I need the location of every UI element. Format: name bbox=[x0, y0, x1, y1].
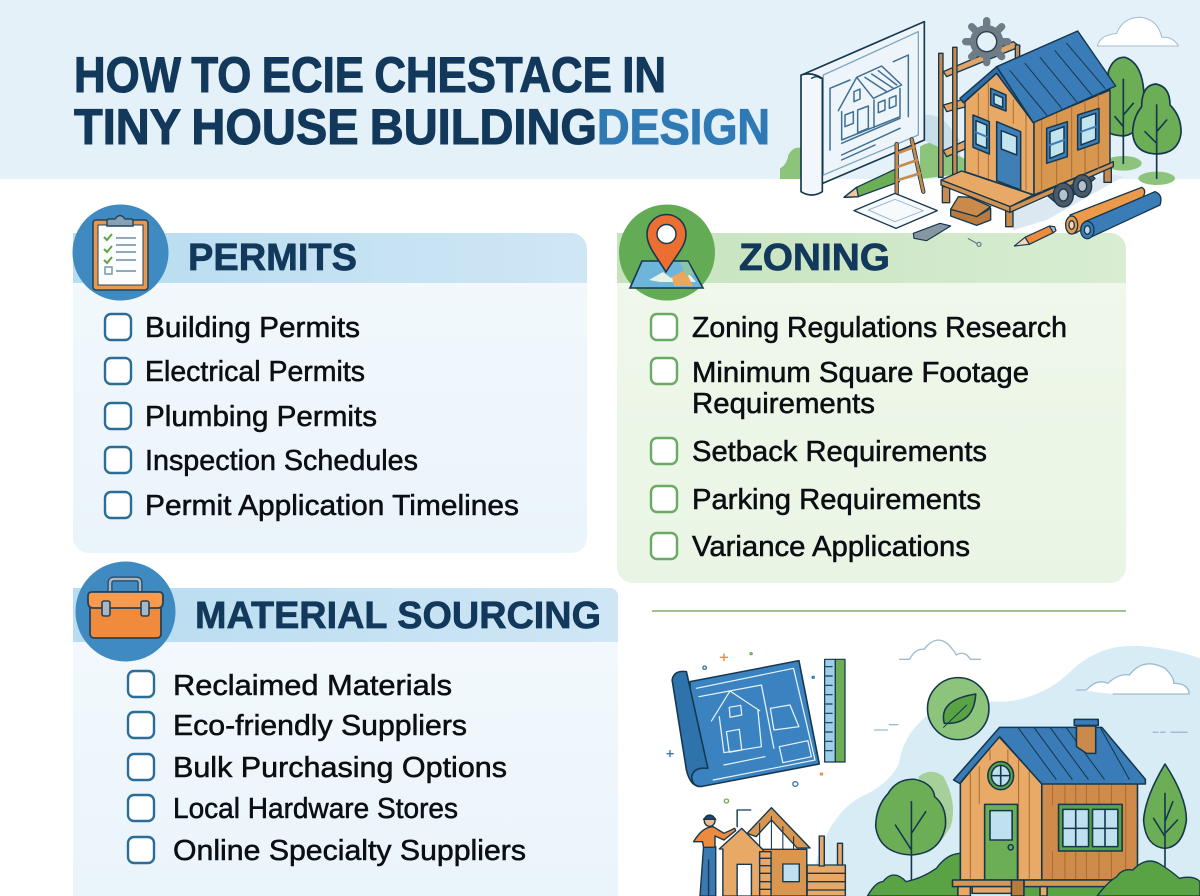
title: HOW TO ECIE CHESTACE IN bbox=[74, 47, 666, 103]
permits checklist: Plumbing Permits bbox=[145, 401, 377, 433]
ruler bbox=[825, 659, 845, 762]
deck bbox=[941, 162, 1113, 227]
title: TINY HOUSE BUILDING bbox=[74, 99, 597, 155]
sparkles bbox=[667, 653, 822, 803]
trailer bbox=[1047, 169, 1095, 203]
illustration: finished tiny house and plans bbox=[667, 640, 1200, 896]
permits checklist bbox=[105, 312, 519, 522]
heading: zoning: ZONING bbox=[739, 237, 890, 279]
zoning checklist bbox=[651, 312, 1067, 563]
trees bbox=[1105, 57, 1181, 185]
material sourcing checklist: Eco-friendly Suppliers bbox=[173, 710, 467, 742]
zoning checklist: Zoning Regulations Research bbox=[692, 312, 1067, 344]
icon: map pin bbox=[619, 204, 715, 300]
icon: toolbox bbox=[76, 562, 176, 662]
panel: zoning bbox=[617, 204, 1126, 583]
illustration: tiny house on trailer with blueprint bbox=[780, 17, 1181, 246]
wheels bbox=[1053, 175, 1092, 207]
permits checklist: Building Permits bbox=[145, 312, 360, 344]
permits checklist: Permit Application Timelines bbox=[145, 490, 519, 522]
permits checklist: Electrical Permits bbox=[145, 356, 365, 388]
trees bbox=[876, 764, 1186, 880]
material rolls bbox=[1066, 187, 1161, 239]
heading: permits: PERMITS bbox=[188, 237, 357, 279]
zoning checklist: Parking Requirements bbox=[692, 484, 981, 516]
cloud bbox=[1097, 17, 1178, 46]
ladder bbox=[897, 139, 923, 197]
background hill bbox=[808, 646, 1200, 896]
leaf badge bbox=[927, 678, 989, 740]
panel: material sourcing bbox=[73, 562, 618, 896]
zoning checklist: Variance Applications bbox=[692, 531, 970, 563]
roof bbox=[960, 31, 1116, 123]
zoning checklist: Requirements bbox=[692, 388, 875, 420]
material sourcing checklist: Bulk Purchasing Options bbox=[173, 752, 507, 784]
heading: material sourcing: MATERIAL SOURCING bbox=[195, 595, 601, 637]
pencil bbox=[844, 169, 899, 197]
material sourcing checklist: Local Hardware Stores bbox=[173, 793, 458, 825]
walls bbox=[965, 73, 1110, 195]
permits checklist: Inspection Schedules bbox=[145, 445, 418, 477]
title bbox=[74, 47, 770, 155]
small tools bbox=[913, 223, 1056, 246]
gear bbox=[966, 21, 1008, 63]
blueprint sheet bbox=[802, 22, 924, 183]
clouds bbox=[875, 640, 1189, 732]
bushes bbox=[867, 853, 961, 896]
material sourcing checklist: Online Specialty Suppliers bbox=[173, 835, 526, 867]
main house bbox=[952, 719, 1145, 896]
material sourcing header band bbox=[73, 588, 618, 642]
floor plan sheet bbox=[854, 193, 937, 228]
panel: permits bbox=[72, 204, 587, 553]
title: DESIGN bbox=[597, 99, 770, 155]
zoning checklist: Minimum Square Footage bbox=[692, 357, 1029, 389]
icon: clipboard bbox=[72, 204, 168, 300]
header band bbox=[0, 0, 1200, 179]
permits header band bbox=[73, 233, 587, 283]
zoning header band bbox=[617, 233, 1126, 283]
material sourcing checklist bbox=[128, 670, 526, 867]
right bush bbox=[1097, 861, 1200, 896]
blueprint bbox=[672, 661, 819, 787]
worker and small frame house bbox=[694, 808, 845, 896]
material sourcing checklist: Reclaimed Materials bbox=[173, 670, 452, 702]
scaffold bbox=[939, 42, 1020, 177]
zoning checklist: Setback Requirements bbox=[692, 436, 987, 468]
